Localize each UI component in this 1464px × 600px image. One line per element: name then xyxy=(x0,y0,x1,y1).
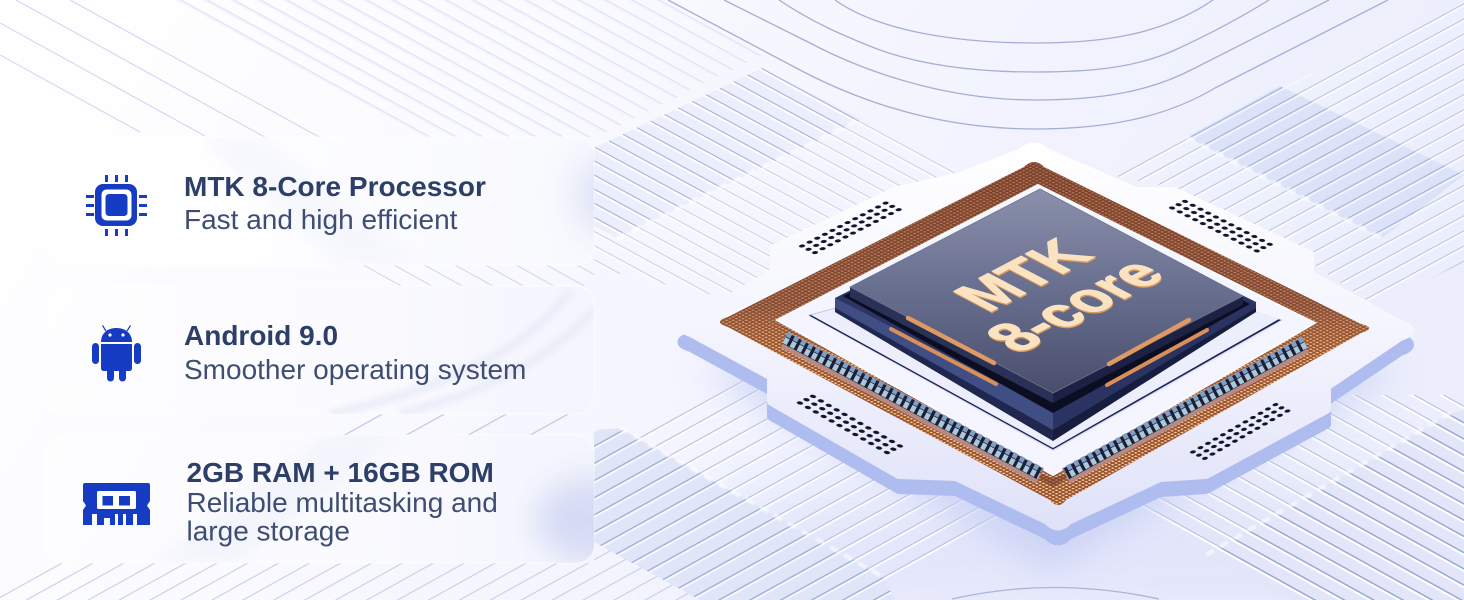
thin lines upper left of chip xyxy=(594,117,970,302)
streak lines lower left xyxy=(594,428,895,600)
text: Smoother operating system: Smoother operating system xyxy=(184,354,526,385)
lines between panels xyxy=(360,265,594,286)
icon: processor chip xyxy=(86,175,147,236)
chip illustration xyxy=(682,148,1409,540)
text: Fast and high efficient: Fast and high efficient xyxy=(184,204,458,235)
panel: memory xyxy=(60,434,594,564)
icon: android robot xyxy=(92,326,141,382)
chip label: MTK 8-core: 8-core xyxy=(970,250,1180,360)
text: Reliable multitasking and large storage: Reliable multitasking and xyxy=(186,487,498,518)
inner white field xyxy=(777,185,1315,475)
heading: MTK 8-Core Processor: MTK 8-Core Processor xyxy=(184,171,486,202)
heading: 2GB RAM + 16GB ROM: 2GB RAM + 16GB ROM xyxy=(186,457,494,488)
chip label: MTK 8-core: MTK xyxy=(939,232,1108,321)
chip base layer xyxy=(835,195,1256,441)
faint lines below panels xyxy=(0,542,700,600)
substrate sheet xyxy=(807,250,1283,451)
chip black gap xyxy=(843,195,1250,413)
sparkle highlights on lines xyxy=(617,119,1451,577)
streak lines upper right xyxy=(1187,86,1464,238)
soft shadow under chip plate xyxy=(700,330,1400,570)
plate top surface xyxy=(682,148,1409,526)
copper strips xyxy=(891,318,1207,385)
streak lines upper left xyxy=(594,68,862,238)
panel: MTK processor xyxy=(86,136,594,266)
coil right xyxy=(1064,339,1306,476)
solder dots xyxy=(793,198,1294,462)
concentric arcs at top xyxy=(668,0,1388,129)
thin lines lower left of chip xyxy=(594,370,1005,585)
background lower tint xyxy=(720,500,1400,600)
arc at bottom xyxy=(952,588,1159,599)
thin lines upper right of chip xyxy=(1115,0,1464,306)
panel: Android xyxy=(45,286,594,414)
shadow under chip xyxy=(830,300,1270,446)
icon: RAM module xyxy=(83,483,150,525)
coil left xyxy=(784,334,1042,476)
heading: Android 9.0: Android 9.0 xyxy=(184,320,338,351)
wide diagonal lines top left xyxy=(0,0,330,143)
chip label: MTK 8-core: 8-core xyxy=(970,251,1181,362)
chip top surface xyxy=(850,189,1243,393)
plate extrusion xyxy=(682,300,1409,540)
thin lines lower right of chip xyxy=(1125,395,1464,600)
chip label: MTK 8-core: MTK xyxy=(939,231,1108,319)
light diagonal line field xyxy=(175,0,762,137)
copper ring xyxy=(720,162,1369,505)
streak lines lower right xyxy=(1206,410,1464,600)
text: Reliable multitasking and large storage: large storage xyxy=(186,516,350,546)
chip upper side xyxy=(850,287,1243,403)
